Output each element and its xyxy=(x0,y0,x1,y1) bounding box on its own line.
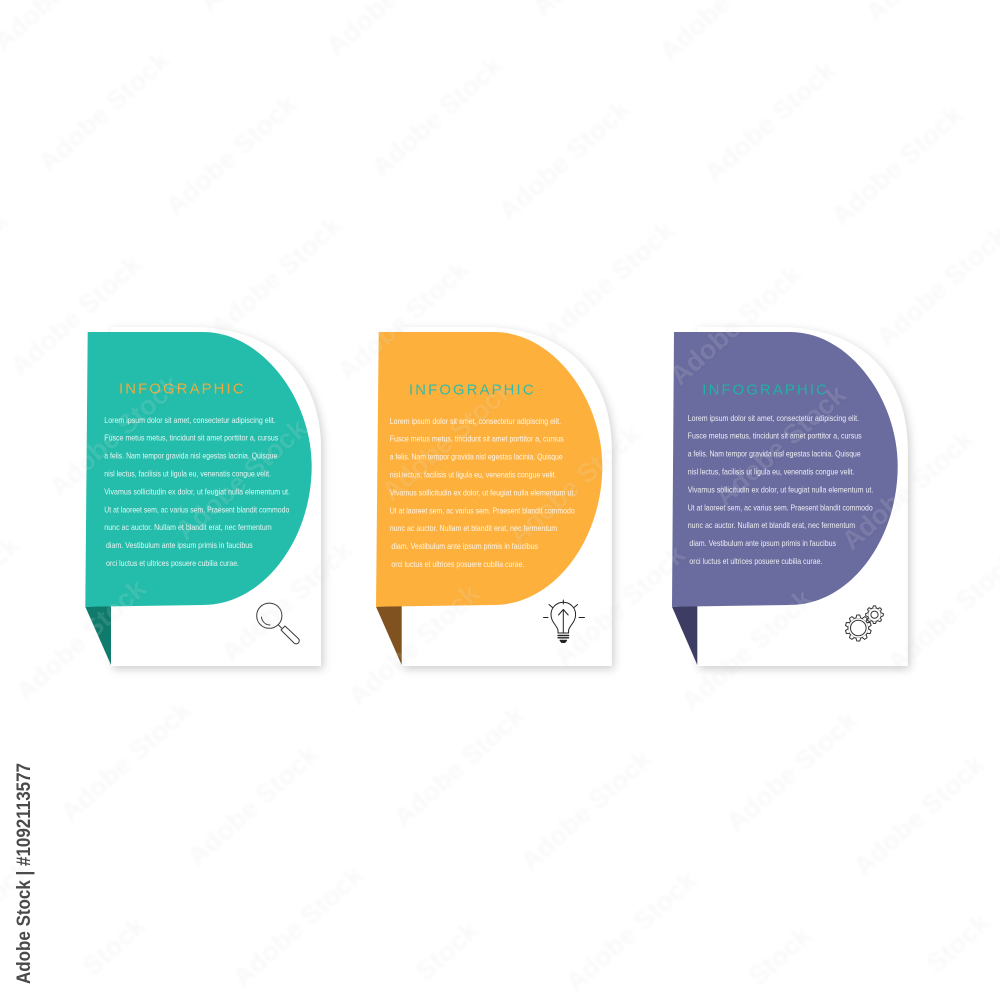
body text: Fusce metus metus, tincidunt sit amet porttitor a, cursus xyxy=(390,435,564,444)
panel: purple card xyxy=(672,327,908,666)
icon: gears xyxy=(845,606,883,641)
watermark pattern: Adobe Stock xyxy=(365,49,508,182)
white card backing xyxy=(111,327,321,666)
white card backing xyxy=(697,327,908,666)
watermark pattern: Stock xyxy=(76,910,151,981)
watermark pattern: Adobe Stock xyxy=(709,379,852,512)
teal banner shape xyxy=(85,332,312,607)
heading: INFOGRAPHIC xyxy=(702,383,827,399)
body text: Fusce metus metus, tincidunt sit amet porttitor a, cursus xyxy=(104,434,278,443)
watermark pattern: Adobe Stock xyxy=(226,859,369,992)
panel: orange card xyxy=(376,327,612,666)
watermark pattern: Stock xyxy=(409,915,484,986)
watermark pattern: Adobe Stock xyxy=(503,418,646,551)
body text: nunc ac auctor. Nullam et blandit erat, nec fermentum xyxy=(390,524,557,533)
watermark pattern: Adobe Stock xyxy=(43,369,186,502)
body text: nisl lectus, facilisis ut ligula eu, venenatis congue velit. xyxy=(104,470,271,478)
body text: a felis. Nam tempor gravida nisl egestas lacinia. Quisque xyxy=(688,450,861,459)
watermark pattern: Adobe Stock xyxy=(170,413,313,546)
body text: orci luctus et ultrices posuere cubilia curae. xyxy=(391,560,524,569)
watermark pattern: Adobe Stock xyxy=(331,253,474,386)
body text: a felis. Nam tempor gravida nisl egestas lacinia. Quisque xyxy=(390,453,563,462)
body text: Vivamus sollicitudin ex dolor, ut feugiat nulla elementum ut. xyxy=(688,485,873,494)
body text: Lorem ipsum dolor sit amet, consectetur adipiscing elit. xyxy=(390,417,561,426)
folded corner xyxy=(672,606,697,665)
body text: Vivamus sollicitudin ex dolor, ut feugiat nulla elementum ut. xyxy=(104,487,290,496)
watermark pattern: Adobe Stock xyxy=(675,583,818,716)
body text: diam. Vestibulum ante ipsum primis in faucibus xyxy=(689,539,836,548)
watermark pattern: Adobe Stock xyxy=(825,98,968,231)
watermark pattern: Adobe Stock xyxy=(215,534,358,667)
watermark pattern: Adobe Stock xyxy=(204,209,347,342)
body text: nunc ac auctor. Nullam et blandit erat, nec fermentum xyxy=(688,521,855,530)
body text: Ut at laoreet sem, ac varius sem. Praesent blandit commodo xyxy=(390,506,575,515)
icon: light bulb xyxy=(544,600,584,642)
body text: orci luctus et ultrices posuere cubilia curae. xyxy=(106,559,239,568)
watermark pattern: Adobe Stock xyxy=(9,573,152,706)
body text: orci luctus et ultrices posuere cubilia curae. xyxy=(689,557,822,566)
orange banner shape xyxy=(376,332,602,607)
body text: nisl lectus, facilisis ut ligula eu, venenatis congue velit. xyxy=(390,470,556,480)
body text: Vivamus sollicitudin ex dolor, ut feugiat nulla elementum ut. xyxy=(390,488,575,497)
watermark pattern: Adobe Stock xyxy=(836,423,979,556)
body text: Lorem ipsum dolor sit amet, consectetur adipiscing elit. xyxy=(688,414,859,423)
body text: nunc ac auctor. Nullam et blandit erat, nec fermentum xyxy=(104,523,272,532)
white card backing xyxy=(402,327,612,666)
watermark pattern: Adobe Stock xyxy=(720,704,863,837)
stock id label: Adobe Stock | #1092113577 xyxy=(14,763,35,984)
watermark pattern: Stock xyxy=(742,920,817,991)
watermark pattern: Adobe Stock xyxy=(514,743,657,876)
folded corner xyxy=(85,606,111,665)
body text: Ut at laoreet sem, ac varius sem. Praesent blandit commodo xyxy=(688,503,873,512)
watermark pattern: Adobe Stock xyxy=(559,864,702,997)
body text: diam. Vestibulum ante ipsum primis in faucibus xyxy=(106,541,253,550)
body text: Fusce metus metus, tincidunt sit amet porttitor a, cursus xyxy=(688,432,862,441)
body text: Lorem ipsum dolor sit amet, consectetur adipiscing elit. xyxy=(104,416,276,425)
watermark pattern: Adobe Stock xyxy=(54,694,197,827)
heading: INFOGRAPHIC xyxy=(119,381,244,397)
body text xyxy=(688,414,873,566)
watermark pattern: Adobe Stock xyxy=(4,248,147,381)
watermark pattern: Adobe Stock xyxy=(847,748,990,881)
purple banner shape xyxy=(672,332,898,607)
body text: nisl lectus, facilisis ut ligula eu, venenatis congue velit. xyxy=(688,468,854,476)
watermark pattern: Adobe Stock xyxy=(181,738,324,871)
watermark pattern: Adobe Stock xyxy=(342,578,485,711)
heading: INFOGRAPHIC xyxy=(409,383,534,399)
body text xyxy=(390,417,575,569)
body text: Ut at laoreet sem, ac varius sem. Praesent blandit commodo xyxy=(104,505,290,514)
watermark pattern: Adobe Stock xyxy=(376,374,519,507)
body text: a felis. Nam tempor gravida nisl egestas lacinia. Quisque xyxy=(104,452,278,461)
icon: magnifying glass xyxy=(257,603,299,644)
watermark pattern: Adobe Stock xyxy=(698,54,841,187)
watermark pattern: Adobe Stock xyxy=(548,539,691,672)
watermark pattern: Adobe Stock xyxy=(537,214,680,347)
panel: teal card xyxy=(85,327,321,666)
folded corner xyxy=(376,606,402,665)
body text xyxy=(104,416,290,568)
watermark pattern: Adobe Stock xyxy=(159,88,302,221)
watermark pattern: Adobe Stock xyxy=(492,93,635,226)
watermark pattern: Adobe Stock xyxy=(664,258,807,391)
body text: diam. Vestibulum ante ipsum primis in faucibus xyxy=(391,542,538,551)
watermark pattern: Stock xyxy=(920,907,995,978)
watermark pattern: Adobe Stock xyxy=(32,44,175,177)
watermark pattern: Adobe Stock xyxy=(387,699,530,832)
